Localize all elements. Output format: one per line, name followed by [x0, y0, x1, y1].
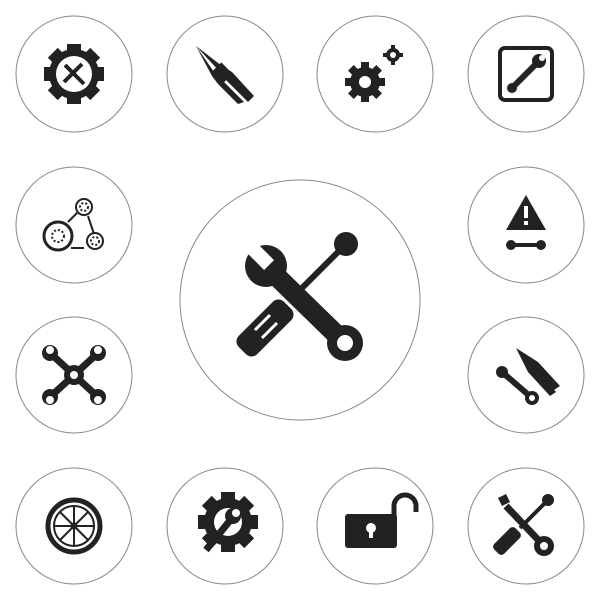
- icon: gear with wrenches: [44, 44, 104, 104]
- icon: wrench in square: [500, 48, 552, 100]
- icon: network of wheels: [44, 199, 103, 250]
- icon: central wrench and screwdriver: [233, 232, 363, 361]
- icon: small wrench and screwdriver: [491, 494, 554, 557]
- icon: pliers: [196, 46, 254, 104]
- icon: wheel: [48, 500, 100, 552]
- icon: wrenches with gear: [42, 345, 106, 405]
- icon: warning with wrench: [506, 195, 546, 250]
- icon: gears: [345, 45, 403, 102]
- icon: open padlock: [345, 495, 416, 548]
- icon: pliers and wrench: [496, 348, 560, 405]
- icon: gear with wrench: [198, 492, 258, 552]
